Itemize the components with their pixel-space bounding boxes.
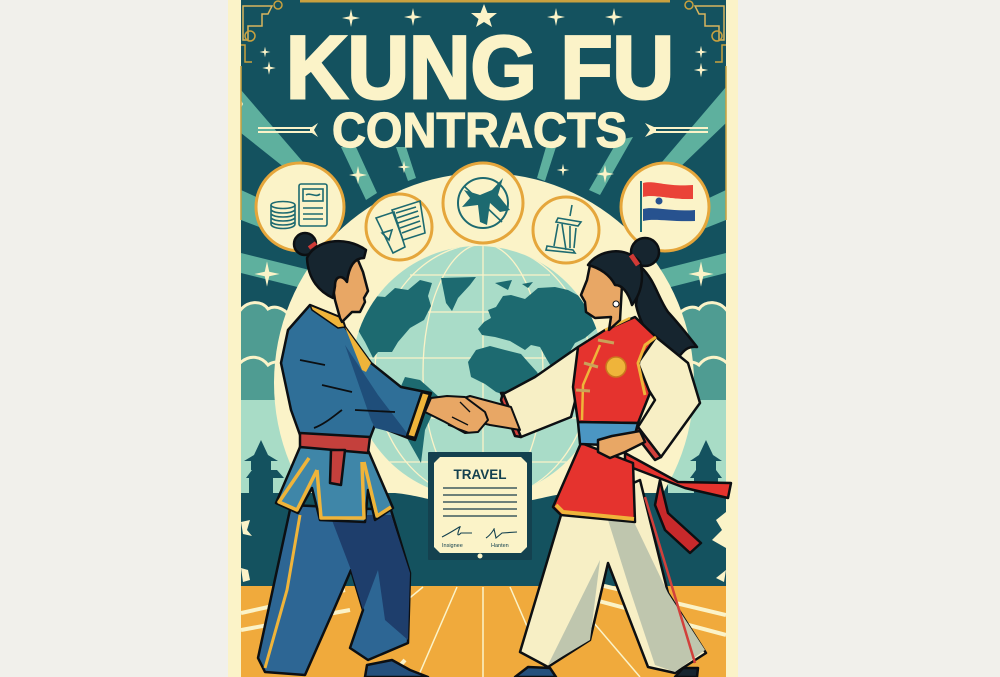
clouds right bbox=[668, 303, 728, 496]
woman's frog buttons bbox=[576, 340, 614, 391]
icon: flag bbox=[621, 163, 709, 251]
icon: papers bbox=[366, 194, 432, 260]
woman's shoes bbox=[515, 667, 556, 677]
dark ground band and skyline bbox=[241, 493, 726, 590]
figure: woman in red bbox=[501, 238, 731, 677]
man's trousers bbox=[258, 505, 410, 675]
woman's ponytail bbox=[636, 267, 697, 358]
pagoda right bbox=[690, 440, 722, 495]
icon: no-fly plane bbox=[443, 163, 523, 243]
floor lines bbox=[241, 585, 726, 677]
contract heading: TRAVEL bbox=[454, 467, 506, 482]
background panel bbox=[239, 0, 728, 677]
title: KUNG FU bbox=[286, 17, 674, 117]
stars bbox=[254, 4, 714, 287]
contract card: Insignee bbox=[442, 543, 463, 549]
woman's hand on hip bbox=[598, 431, 645, 458]
cream sun disc bbox=[274, 175, 694, 500]
contract text lines bbox=[443, 488, 517, 516]
pagoda left bbox=[244, 440, 284, 495]
icon: monument bbox=[533, 197, 599, 263]
handshake bbox=[425, 396, 520, 433]
poster bbox=[228, 0, 738, 677]
man's head bbox=[332, 253, 368, 322]
woman's right sleeve bbox=[638, 337, 700, 457]
distressed paper specks bbox=[241, 100, 726, 582]
subtitle: CONTRACTS bbox=[332, 104, 627, 158]
contract signatures bbox=[442, 527, 517, 538]
man's collar bbox=[310, 305, 345, 328]
woman's sash bbox=[625, 453, 731, 498]
woman's left sleeve bbox=[501, 347, 578, 437]
globe bbox=[356, 246, 598, 488]
woman's vest bbox=[573, 317, 656, 423]
woman's head bbox=[581, 265, 622, 330]
contract card bbox=[428, 452, 532, 560]
poster paper bbox=[228, 0, 738, 677]
flourish right bbox=[645, 123, 708, 137]
figure: man in blue bbox=[258, 233, 431, 677]
clouds left bbox=[241, 301, 291, 493]
man's belt bbox=[300, 433, 370, 453]
orange floor bbox=[241, 586, 726, 677]
woman's belt bbox=[578, 422, 638, 446]
man's tunic skirt bbox=[276, 447, 393, 522]
globe grid bbox=[367, 246, 588, 486]
icon: coins and document bbox=[256, 163, 344, 251]
continents bbox=[352, 277, 598, 463]
flourish left bbox=[258, 123, 318, 137]
contract card: Hanten bbox=[491, 543, 509, 549]
man's torso and sleeve bbox=[281, 305, 431, 440]
woman's trousers bbox=[520, 480, 706, 673]
woman's emblem bbox=[606, 357, 626, 377]
gold frame bbox=[241, 1, 726, 220]
man's shoes bbox=[365, 660, 428, 677]
woman's tunic skirt bbox=[553, 443, 635, 522]
sunburst rays bbox=[241, 87, 726, 300]
